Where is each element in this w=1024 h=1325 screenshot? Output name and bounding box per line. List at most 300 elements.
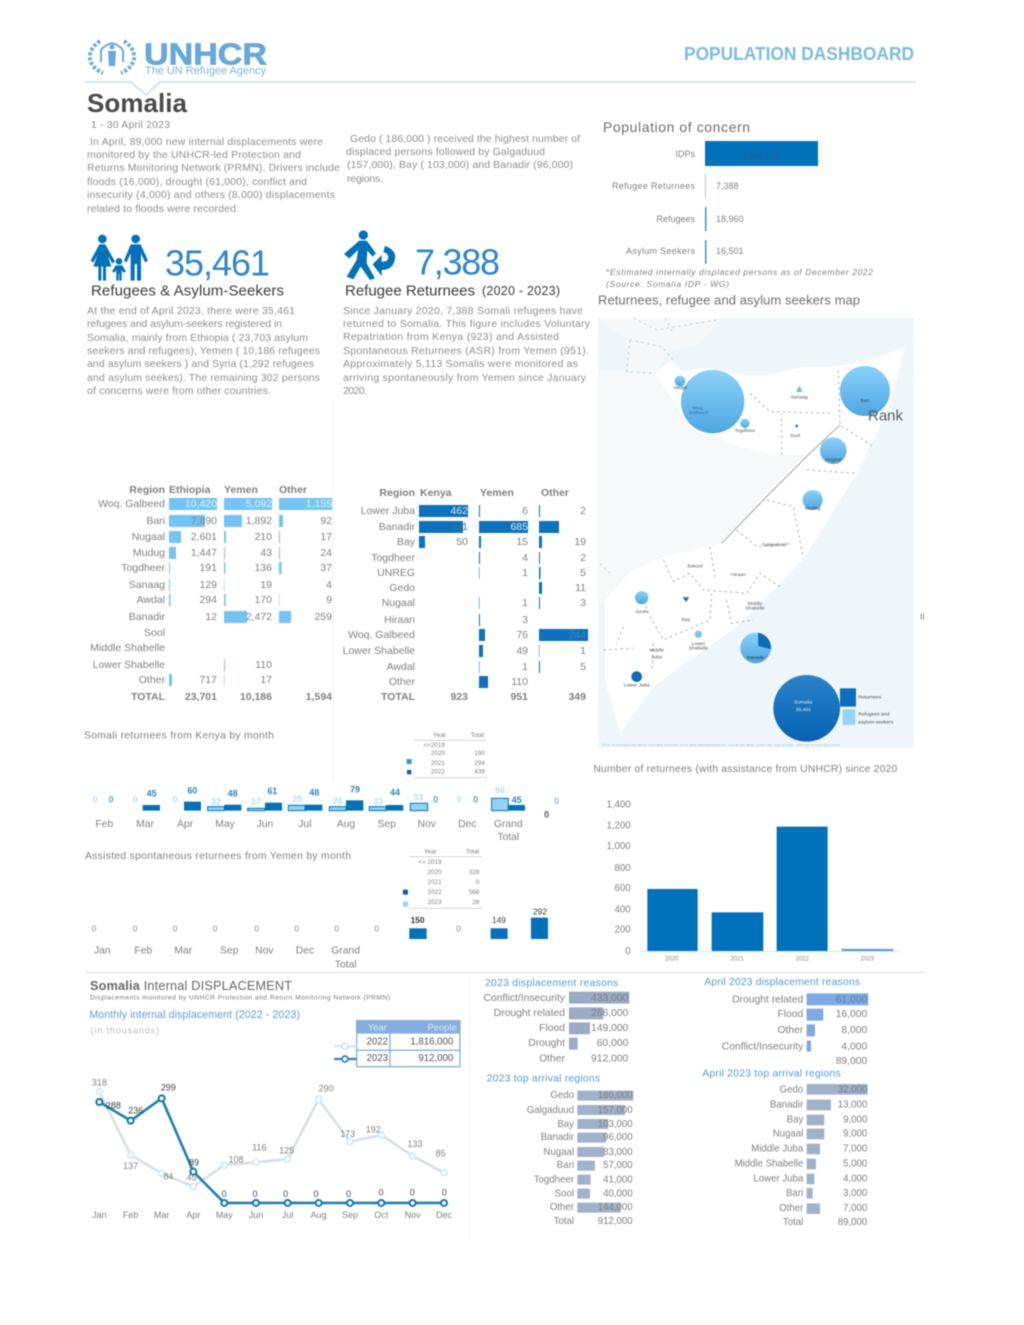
data labels: 290	[318, 1083, 333, 1093]
table: returnees by region and origin: 5	[580, 661, 586, 673]
table: returnees by region and origin: 1	[522, 597, 528, 609]
table: refugees by region and origin: 17	[260, 674, 272, 686]
text block: summary right	[346, 133, 580, 185]
table: refugees by region and origin: 10,420	[185, 498, 217, 510]
chart: Yemen returnees by month: 0	[334, 923, 339, 933]
chart: Kenya returnees by month: 33	[373, 797, 383, 807]
panel: population of concern: Refugees	[656, 214, 695, 224]
chart: Yemen returnees by month: 150	[411, 915, 425, 925]
panel: internal displacement: Apr	[186, 1210, 200, 1220]
chart: Kenya returnees by month: 0	[108, 794, 113, 804]
text block: summary left: In April, 89,000 new internal displacements were	[90, 136, 323, 148]
data labels: 0	[252, 1189, 257, 1199]
panel: displacement reasons and arrival regions	[483, 977, 868, 1228]
table: 2023 top arrival regions: 912,000	[598, 1216, 633, 1227]
chart: returnees with UNHCR assistance since 2020: 1,200	[606, 820, 631, 831]
table: 2023 top arrival regions: Bay	[557, 1119, 574, 1130]
text block: returnees: 2020.	[343, 385, 367, 397]
text block: refugees: seekers and refugees), Yemen ( 10,186 refugees	[87, 345, 320, 357]
table: refugees by region and origin: Other	[279, 484, 307, 496]
table: yearly totals: 1,816,000	[410, 1036, 453, 1047]
mini table: Yemen years: 328	[469, 869, 480, 876]
text block: returnees: Spontaneous Returnees (ASR) from Yemen (951).	[343, 345, 589, 357]
text block: summary left	[87, 136, 340, 215]
heading: refugees and asylum seekers: Refugees & Asylum-Seekers	[91, 282, 284, 300]
table: 2023 top arrival regions: 96,000	[603, 1132, 633, 1143]
data labels: 108	[228, 1154, 243, 1164]
text block: returnees	[343, 305, 591, 397]
text block: returnees: Since January 2020, 7,388 Somali refugees have	[343, 305, 583, 317]
data labels: 299	[161, 1082, 176, 1092]
table: refugees by region and origin: Middle Shabelle	[90, 642, 165, 654]
chart: returnees with UNHCR assistance since 2020: Number of returnees (with assistance from UNHCR) since 2020	[593, 764, 898, 775]
table: refugees by region and origin: 259	[314, 611, 332, 623]
chart: Kenya returnees by month: Mar	[136, 819, 154, 830]
table: returnees by region and origin: Awdal	[387, 661, 415, 673]
table: refugees by region and origin: Woq. Galbeed	[98, 498, 165, 510]
table: 2023 displacement reasons: 912,000	[591, 1053, 629, 1064]
table: returnees by region and origin: 685	[510, 521, 528, 533]
chart: returnees with UNHCR assistance since 2020: 400	[615, 904, 631, 915]
chart: returnees with UNHCR assistance since 2020: 1,000	[606, 841, 631, 852]
chart: Kenya returnees by month: 39	[292, 794, 302, 804]
logo: UNHCR: UNHCR	[144, 36, 267, 72]
faint dividers	[333, 400, 470, 1240]
table: 2023 top arrival regions: 2023 top arrival regions	[487, 1073, 600, 1084]
chart: Yemen returnees by month: 0	[254, 923, 259, 933]
chart: Kenya returnees by month: 79	[350, 784, 360, 794]
chart: Yemen returnees by month: Mar	[174, 945, 193, 956]
table: 2023 top arrival regions: Sool	[555, 1188, 574, 1199]
mini table: Kenya years: 2020	[431, 750, 445, 757]
table: yearly totals: 2023	[367, 1053, 388, 1064]
data labels	[92, 1078, 447, 1199]
table: April 2023 displacement reasons: Flood	[777, 1009, 804, 1020]
table: refugees by region and origin: 2,601	[191, 531, 217, 543]
chart: returnees with UNHCR assistance since 2020: 2022	[796, 956, 810, 962]
map labels: Nugaal	[825, 457, 841, 463]
panel: internal displacement: Jan	[92, 1210, 107, 1220]
table: returnees by region and origin: Gedo	[389, 582, 415, 594]
map labels: Juba	[651, 654, 662, 660]
chart: Yemen returnees by month: Jan	[94, 945, 111, 956]
chart: Kenya returnees by month: Jun	[257, 819, 274, 830]
map labels: Banadir	[747, 655, 765, 661]
text block: summary left: insecurity (4,000) and others (8,000) displacements	[87, 189, 335, 201]
table: 2023 top arrival regions: 103,000	[598, 1119, 633, 1130]
table: refugees by region and origin: Nugaal	[132, 531, 165, 543]
map labels: Middle	[649, 648, 664, 654]
table: 2023 displacement reasons: 433,000	[591, 993, 629, 1004]
chart: Yemen returnees by month: 0	[456, 923, 461, 933]
panel: internal displacement: (in thousands)	[91, 1025, 159, 1035]
data labels: 0	[221, 1189, 226, 1199]
panel: population of concern: 7,388	[716, 181, 739, 191]
panel: internal displacement: Somalia Internal DISPLACEMENT	[90, 979, 292, 993]
table: returnees by region and origin: Yemen	[480, 487, 514, 499]
table: April 2023 top arrival regions: 7,000	[843, 1203, 867, 1214]
table: 2023 displacement reasons: Other	[539, 1053, 566, 1064]
logo: UNHCR: The UN Refugee Agency	[145, 65, 266, 77]
chart: Kenya returnees by month: 60	[187, 786, 197, 796]
chart: Kenya returnees by month: Total	[497, 832, 519, 843]
table: 2023 displacement reasons: Drought	[528, 1038, 565, 1049]
data labels: 288	[106, 1101, 121, 1111]
table: April 2023 top arrival regions: 9,000	[843, 1128, 867, 1139]
panel: population of concern	[603, 119, 873, 289]
table: refugees by region and origin: Lower Shabelle	[93, 659, 165, 671]
map labels	[624, 385, 894, 725]
text block: summary right: Gedo ( 186,000 ) received the highest number of	[350, 133, 580, 145]
chart: Kenya returnees by month: 0	[132, 794, 137, 804]
table: refugees by region and origin: 37	[320, 562, 332, 574]
chart: Kenya returnees by month: Jul	[298, 819, 312, 830]
chart: Kenya returnees by month: 61	[267, 786, 277, 796]
table: returnees by region and origin: 19	[574, 536, 586, 548]
table: returnees by region and origin: 4	[522, 552, 528, 564]
divider	[85, 972, 925, 974]
table: refugees by region and origin: 294	[199, 594, 217, 606]
table: April 2023 top arrival regions: Gedo	[780, 1084, 803, 1095]
panel: population of concern: Refugee Returnees	[612, 181, 696, 191]
table: refugees by region and origin: Banadir	[129, 611, 165, 623]
table: April 2023 displacement reasons: 4,000	[841, 1041, 868, 1052]
table: returnees by region and origin: 1	[522, 661, 528, 673]
table: April 2023 top arrival regions: Middle Shabelle	[735, 1158, 803, 1169]
text block: summary left: monitored by the UNHCR-led Protection and	[87, 149, 301, 161]
table: returnees by region and origin: 3	[522, 614, 528, 626]
chart: Yemen returnees by month: 0	[173, 923, 178, 933]
table: April 2023 top arrival regions: 5,000	[843, 1158, 867, 1169]
table: 2023 top arrival regions: 186,000	[598, 1090, 633, 1101]
data labels: 137	[123, 1161, 138, 1171]
table: refugees by region and origin: Other	[139, 674, 165, 686]
map labels: Returnees	[858, 694, 882, 700]
chart: Yemen returnees by month: Sep	[220, 945, 239, 956]
icon: returnee	[344, 230, 395, 280]
data labels: 0	[313, 1189, 318, 1199]
table: April 2023 top arrival regions: Bay	[787, 1114, 803, 1125]
map: Somalia returnees and refugees	[598, 318, 914, 748]
table: returnees by region and origin: 5	[580, 567, 586, 579]
chart: Yemen returnees by month: 0	[133, 923, 138, 933]
chart: Kenya returnees by month: 0	[92, 794, 97, 804]
table: refugees by region and origin: 9	[326, 594, 332, 606]
table: yearly totals	[357, 1021, 460, 1067]
table: April 2023 top arrival regions: 89,000	[838, 1217, 867, 1228]
map labels: Mudug	[805, 505, 820, 511]
map labels: Lower Juba	[624, 683, 650, 689]
map labels: Shabelle	[745, 606, 765, 612]
table: refugees by region and origin	[90, 484, 332, 703]
panel: population of concern: Asylum Seekers	[626, 246, 696, 256]
panel: population of concern: *Estimated internally displaced persons as of December 2022	[606, 267, 873, 277]
table: 2023 top arrival regions: 144,000	[598, 1202, 633, 1213]
data labels: 133	[407, 1139, 422, 1149]
table: 2023 displacement reasons: Flood	[539, 1023, 565, 1034]
text block: summary left: Returns Monitoring Network (PRMN). Drivers include	[87, 162, 340, 174]
table: returnees by region and origin: 50	[456, 536, 468, 548]
chart: returnees with UNHCR assistance since 2020	[593, 764, 900, 962]
map labels: Gedo	[636, 609, 648, 615]
table: refugees by region and origin: 12	[205, 611, 217, 623]
map labels: 35,461	[796, 707, 811, 713]
panel: population of concern: Population of concern	[603, 119, 750, 135]
table: refugees by region and origin: 17	[320, 531, 332, 543]
map labels: Sool	[790, 433, 800, 439]
table: 2023 displacement reasons: 2023 displacement reasons	[485, 978, 618, 989]
table: 2023 displacement reasons: 266,000	[591, 1008, 629, 1019]
panel: population of concern: (Source: Somalia IDP - WG)	[606, 279, 729, 289]
chart: Kenya returnees by month: 0	[473, 794, 478, 804]
table: refugees by region and origin: 1,594	[306, 691, 332, 703]
table: 2023 top arrival regions: Galgaduud	[527, 1105, 574, 1116]
heading: map: Returnees, refugee and asylum seekers map	[598, 292, 860, 308]
text block: refugees: and asylum seekers ) and Syria (1,292 refugees	[87, 358, 314, 370]
table: refugees by region and origin: 4	[326, 579, 332, 591]
table: refugees by region and origin: 19	[260, 579, 272, 591]
legend line: 2022	[334, 1043, 357, 1049]
data labels: 0	[378, 1188, 383, 1198]
chart: Kenya returnees by month: Dec	[458, 819, 476, 830]
table: April 2023 top arrival regions: Banadir	[770, 1099, 804, 1110]
map labels: Refugees and	[858, 711, 890, 717]
chart: Yemen returnees by month: Total	[335, 959, 357, 970]
heading: refugee returnees: Refugee Returnees	[345, 282, 475, 300]
table: April 2023 top arrival regions: 32,000	[838, 1084, 867, 1095]
table: refugees by region and origin: 7,890	[191, 515, 217, 527]
chart: Kenya returnees by month: 33	[413, 793, 423, 803]
map labels: Galgaduud	[762, 542, 787, 548]
table: April 2023 top arrival regions: 3,000	[843, 1188, 867, 1199]
panel: population of concern: IDPs	[675, 149, 695, 159]
heading: refugee returnees: (2020 - 2023)	[482, 284, 560, 298]
table: 2023 top arrival regions: 41,000	[603, 1174, 633, 1185]
table: April 2023 displacement reasons: 16,000	[836, 1009, 868, 1020]
chart: Yemen returnees by month: 0	[92, 923, 97, 933]
table: 2023 top arrival regions: Bari	[557, 1160, 574, 1171]
heading: refugee returnees	[345, 282, 560, 300]
table: 2023 displacement reasons: 149,000	[591, 1023, 629, 1034]
line: 2023	[96, 1095, 447, 1206]
table: April 2023 top arrival regions: Nugaal	[773, 1128, 803, 1139]
chart: returnees with UNHCR assistance since 2020: 800	[615, 863, 631, 874]
table: April 2023 top arrival regions	[702, 1068, 868, 1228]
chart: returnees with UNHCR assistance since 2020: 600	[615, 883, 631, 894]
data labels: 0	[283, 1189, 288, 1199]
panel: internal displacement: Monthly internal displacement (2022 - 2023)	[89, 1009, 300, 1021]
table: returnees by region and origin: 76	[516, 629, 528, 641]
map: Somalia returnees and refugees: The boundaries and names shown and the designations used on this map do not imply official endorsement	[602, 743, 840, 747]
text block: refugees: refugees and asylum-seekers registered in	[87, 318, 282, 330]
panel: internal displacement	[89, 979, 460, 1220]
data labels: 192	[366, 1124, 381, 1134]
table: returnees by region and origin: Togdheer	[371, 552, 415, 564]
map labels: Hiraan	[731, 572, 746, 578]
table: returnees by region and origin: Other	[541, 487, 569, 499]
big number: returnees: 7,388	[415, 242, 500, 282]
data labels: 173	[340, 1129, 355, 1139]
data labels: 318	[92, 1078, 107, 1088]
table: returnees by region and origin: 1	[522, 567, 528, 579]
table: 2023 displacement reasons: Conflict/Insecurity	[483, 993, 566, 1004]
table: returnees by region and origin: Region	[379, 487, 415, 499]
table: April 2023 displacement reasons: April 2023 displacement reasons	[704, 977, 860, 988]
chart: Kenya returnees by month: Somali returnees from Kenya by month	[84, 730, 274, 741]
mini table: Kenya years: Total	[471, 732, 484, 739]
mini table: Yemen years: 0	[476, 879, 480, 886]
table: refugees by region and origin: 1,155	[306, 498, 332, 510]
mini table: Yemen years: Total	[466, 848, 479, 855]
table: refugees by region and origin: Sool	[144, 627, 165, 639]
text block: returnees: arriving spontaneously from Yemen since January	[343, 372, 587, 384]
mini table: Kenya years: <=2019	[423, 742, 445, 749]
table: returnees by region and origin: Kenya	[420, 487, 452, 499]
mini table: Kenya years: Year	[433, 732, 446, 739]
chart: returnees with UNHCR assistance since 2020: 1,400	[606, 799, 631, 810]
chart: Yemen returnees by month: 292	[533, 907, 547, 917]
table: 2023 displacement reasons: Drought related	[494, 1008, 565, 1019]
data labels: 45	[187, 1172, 197, 1182]
table: April 2023 displacement reasons: Other	[777, 1025, 804, 1036]
data labels: 85	[436, 1148, 446, 1158]
data labels: 89	[189, 1158, 199, 1168]
map labels: Shabelle	[689, 646, 708, 652]
table: 2023 displacement reasons	[483, 978, 629, 1064]
table: refugees by region and origin: 43	[260, 547, 272, 559]
chart: Yemen returnees by month: Feb	[134, 945, 152, 956]
mini table: Kenya years	[407, 732, 487, 778]
chart: returnees with UNHCR assistance since 2020: 2023	[861, 956, 875, 962]
icon: refugee family	[91, 235, 148, 281]
chart: Kenya returnees by month: 48	[228, 788, 238, 798]
chart: Yemen returnees by month	[85, 848, 548, 970]
table: April 2023 top arrival regions: Bari	[786, 1188, 803, 1199]
table: refugees by region and origin: Awdal	[137, 594, 165, 606]
table: April 2023 top arrival regions: Total	[783, 1217, 803, 1228]
table: refugees by region and origin: 1,892	[246, 515, 272, 527]
table: refugees by region and origin: 92	[320, 515, 332, 527]
text block: returnees: Approximately 5,113 Somalis were monitored as	[343, 358, 578, 370]
table: April 2023 top arrival regions: Lower Juba	[753, 1173, 804, 1184]
text block: refugees: At the end of April 2023, there were 35,461	[87, 305, 295, 317]
table: returnees by region and origin: 49	[516, 645, 528, 657]
table: 2023 top arrival regions: Other	[550, 1202, 575, 1213]
table: returnees by region and origin: 923	[450, 691, 468, 703]
table: refugees by region and origin: Sanaag	[129, 579, 165, 591]
mini table: Yemen years: 2021	[428, 879, 442, 886]
table: refugees by region and origin: 110	[255, 659, 272, 671]
mini table: Kenya years: 294	[474, 760, 485, 767]
map labels: Sanaag	[791, 395, 808, 401]
table: refugees by region and origin: TOTAL	[131, 691, 166, 703]
table: returnees by region and origin: 951	[510, 691, 528, 703]
data labels: 125	[279, 1146, 294, 1156]
chart: returnees with UNHCR assistance since 2020: 200	[615, 924, 631, 935]
table: 2023 top arrival regions: 40,000	[603, 1188, 633, 1199]
chart: Kenya returnees by month: 17	[251, 797, 261, 807]
table: returnees by region and origin: 2	[580, 505, 586, 517]
panel: internal displacement: Oct	[374, 1210, 389, 1220]
chart: Yemen returnees by month: 0	[374, 923, 379, 933]
table: refugees by region and origin: Ethiopia	[169, 484, 211, 496]
mini table: Yemen years	[403, 848, 483, 908]
table: returnees by region and origin: Other	[389, 676, 415, 688]
header rule with notch	[85, 82, 916, 95]
chart: Kenya returnees by month: 0	[433, 794, 438, 804]
chart: Kenya returnees by month: 96	[495, 786, 505, 796]
table: 2023 displacement reasons: 60,000	[597, 1038, 629, 1049]
map labels: Togdheer	[735, 428, 756, 434]
table: refugees by region and origin: 717	[199, 674, 217, 686]
chart: returnees with UNHCR assistance since 2020: 2020	[665, 956, 679, 962]
chart: Yemen returnees by month: 149	[492, 915, 506, 925]
table: April 2023 displacement reasons: Conflict/Insecurity	[722, 1041, 804, 1052]
mini table: Yemen years: 2020	[428, 869, 442, 876]
table: refugees by region and origin: Togdheer	[121, 562, 165, 574]
map labels: asylum-seekers	[858, 719, 894, 725]
table: returnees by region and origin: Lower Juba	[361, 505, 415, 517]
map labels: Middle	[748, 601, 763, 607]
mini table: Yemen years: 568	[469, 889, 480, 896]
legend line: 2023	[334, 1056, 357, 1062]
chart: Kenya returnees by month: 26	[333, 796, 343, 806]
text block: summary right: displaced persons followed by Galgaduud	[346, 146, 545, 158]
table: refugees by region and origin: 129	[199, 579, 217, 591]
table: yearly totals: 912,000	[418, 1053, 453, 1064]
mini table: Kenya years: 2022	[431, 768, 445, 775]
table: refugees by region and origin: 23,701	[185, 691, 217, 703]
table: refugees by region and origin: Region	[129, 484, 165, 496]
text block: returnees: Repatriation from Kenya (923) and Assisted	[343, 331, 559, 343]
neighbouring land	[598, 370, 840, 603]
panel: population of concern: 16,501	[716, 246, 744, 256]
table: returnees by region and origin: 462	[450, 505, 468, 517]
heading: population dashboard: POPULATION DASHBOARD	[684, 44, 914, 64]
text block: summary right: regions.	[347, 173, 383, 185]
panel: internal displacement: Displacements monitored by UNHCR Protection and Return Monitoring Network (PRMN)	[90, 994, 390, 1001]
table: April 2023 displacement reasons: 61,000	[836, 994, 868, 1005]
table: 2023 top arrival regions: Banadir	[541, 1132, 575, 1143]
chart: Kenya returnees by month: 32	[211, 797, 221, 807]
chart: Kenya returnees by month: 44	[390, 788, 400, 798]
table: refugees by region and origin: 136	[254, 562, 272, 574]
Somalia landmass	[605, 347, 905, 733]
table: 2023 top arrival regions: 57,000	[603, 1160, 633, 1171]
chart: Yemen returnees by month: 0	[294, 923, 299, 933]
table: returnees by region and origin: UNREG	[377, 567, 415, 579]
data labels: 116	[252, 1143, 266, 1153]
table: April 2023 top arrival regions: 9,000	[843, 1114, 867, 1125]
text block: refugees: and asylum seekes). The remaining 302 persons	[87, 372, 320, 384]
map labels: Bari	[861, 398, 869, 404]
chart: Kenya returnees by month: 0	[172, 794, 177, 804]
table: returnees by region and origin: 349	[568, 691, 586, 703]
table: 2023 top arrival regions: Total	[554, 1216, 574, 1227]
data labels: 236	[128, 1106, 143, 1116]
chart: returnees with UNHCR assistance since 2020: 0	[625, 946, 631, 957]
stray map label: rank: Rank	[868, 408, 904, 424]
table: 2023 top arrival regions: 83,000	[603, 1147, 633, 1158]
map labels: Galbeed	[689, 410, 708, 416]
table: yearly totals: 2022	[367, 1036, 388, 1047]
table: refugees by region and origin: Yemen	[224, 484, 258, 496]
table: April 2023 top arrival regions: 4,000	[843, 1173, 867, 1184]
panel: internal displacement: Jun	[249, 1210, 263, 1220]
line: 2022	[96, 1089, 447, 1190]
logo: UNHCR	[90, 36, 267, 77]
data labels: 0	[410, 1188, 415, 1198]
